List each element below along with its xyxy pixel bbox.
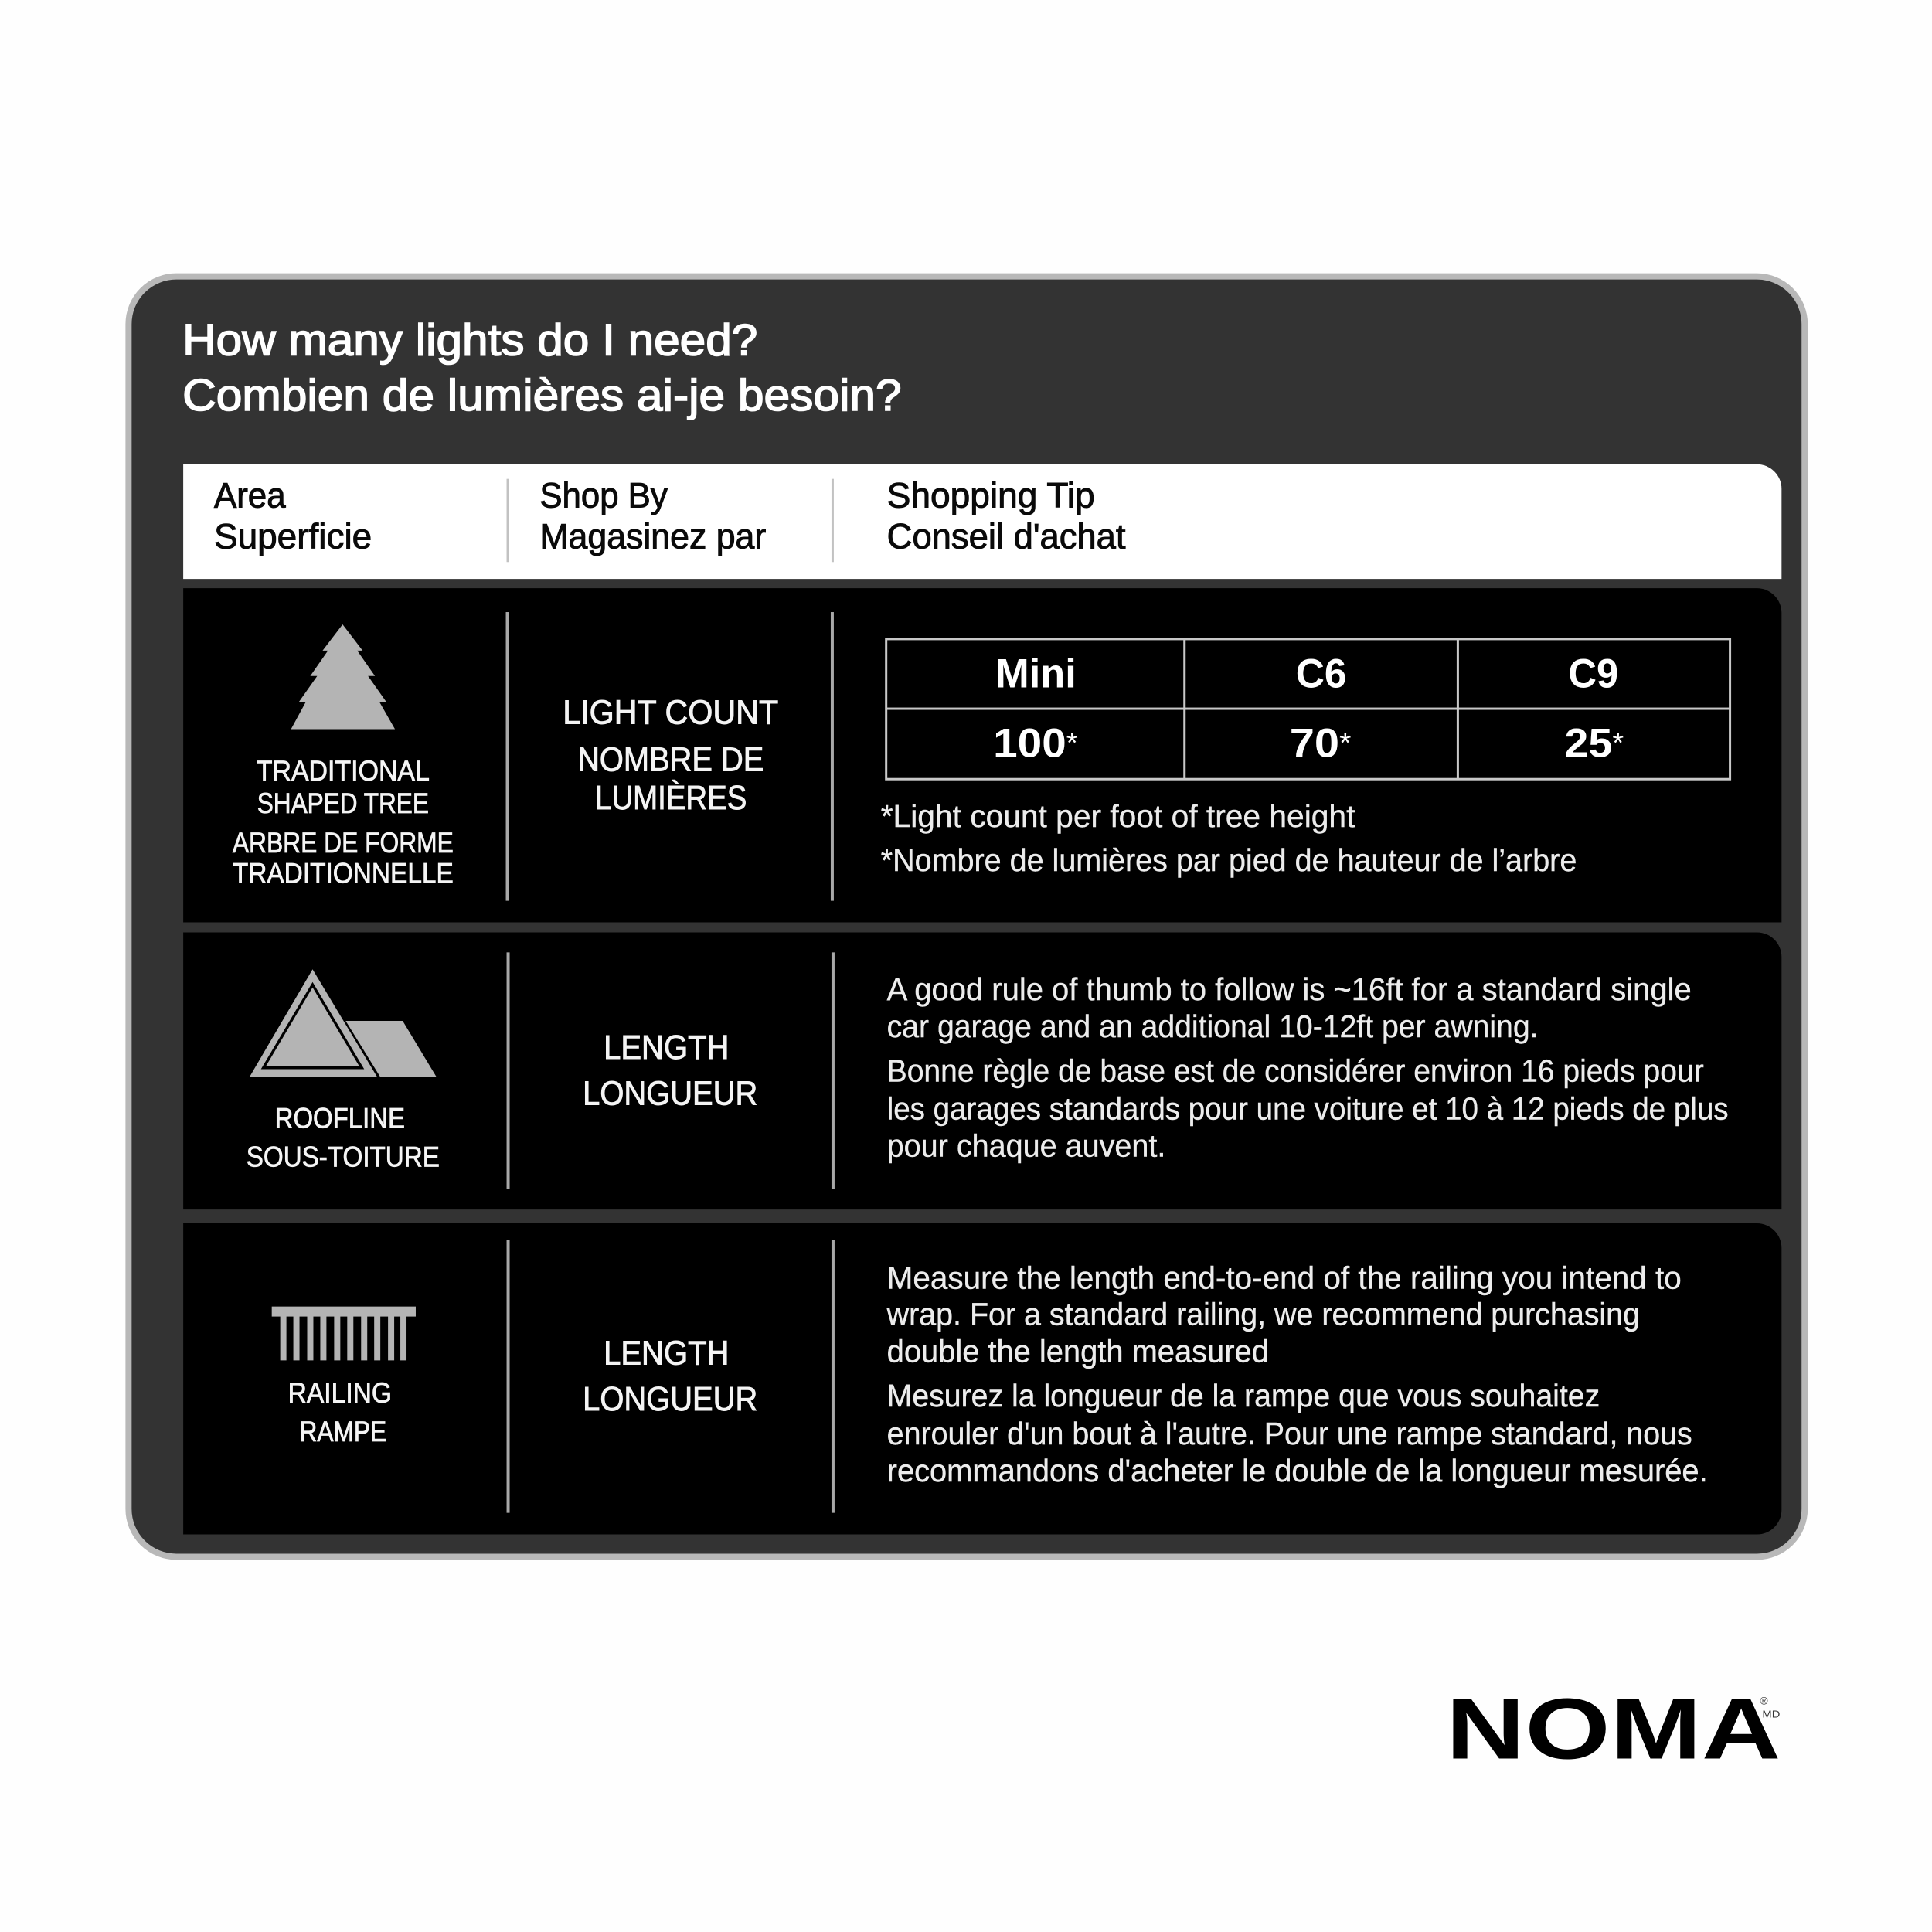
table: light counts: *	[1339, 727, 1351, 758]
panel: railing row	[183, 1223, 1781, 1535]
shop by: light count: LUMIÈRES	[595, 779, 747, 817]
table: light counts: 70	[1290, 720, 1335, 766]
shopping tip: roofline: A good rule of thumb to follow is ~16ft for a standard single	[887, 971, 1692, 1007]
shop by: light count: NOMBRE DE	[577, 740, 764, 778]
shopping tip: roofline: les garages standards pour une voiture et 10 à 12 pieds de plus	[887, 1091, 1729, 1127]
area label: railing: RAILING	[288, 1377, 392, 1409]
shopping tip: roofline: Bonne règle de base est de considérer environ 16 pieds pour	[887, 1053, 1704, 1089]
shop by: light count	[563, 693, 778, 817]
shopping tip: railing: enrouler d'un bout à l'autre. Pour une rampe standard, nous	[887, 1416, 1692, 1451]
icon: roofline	[250, 969, 437, 1077]
table: light counts	[886, 639, 1730, 779]
panel: table header: Shopping Tip	[887, 476, 1095, 515]
panel: table header: Superficie	[214, 516, 372, 556]
area label: tree: TRADITIONAL	[257, 755, 430, 787]
logo: NOMA: NOMA	[1446, 1680, 1781, 1777]
logo: NOMA: ®	[1760, 1695, 1768, 1707]
shop by: light count: LIGHT COUNT	[563, 693, 778, 731]
table: light counts: Mini	[995, 651, 1077, 697]
shopping tip: railing: recommandons d'acheter le double de la longueur mesurée.	[887, 1453, 1708, 1488]
footnotes: *Nombre de lumières par pied de hauteur de l’arbre	[881, 842, 1577, 878]
area label: tree: TRADITIONNELLE	[233, 858, 454, 889]
logo: NOMA: MD	[1762, 1709, 1780, 1720]
shop by: length: LENGTH	[604, 1029, 729, 1066]
panel: table header: Conseil d'achat	[887, 516, 1126, 556]
area label: railing	[288, 1377, 392, 1447]
title: How many lights do I need?	[182, 315, 757, 365]
shop by: length: LONGUEUR	[583, 1075, 757, 1113]
shop by: length	[583, 1334, 757, 1418]
table: light counts: C9	[1568, 651, 1618, 697]
area label: tree: SHAPED TREE	[257, 787, 429, 819]
panel: table header: Area	[214, 476, 286, 515]
table: light counts: C6	[1296, 651, 1346, 697]
area label: railing: RAMPE	[300, 1416, 386, 1447]
area label: roofline	[247, 1103, 440, 1172]
footnotes: *Light count per foot of tree height	[881, 798, 1355, 834]
title	[182, 315, 902, 420]
table: light counts: *	[1612, 727, 1624, 758]
area label: tree	[233, 755, 454, 889]
shopping tip: railing	[886, 1260, 1708, 1488]
panel: table header: Magasinez par	[539, 516, 766, 556]
shopping tip: railing: Measure the length end-to-end of the railing you intend to	[887, 1260, 1682, 1296]
title: Combien de lumières ai-je besoin?	[182, 371, 902, 420]
area label: tree: ARBRE DE FORME	[233, 827, 454, 859]
panel: traditional tree row	[183, 588, 1781, 923]
shopping tip: roofline: pour chaque auvent.	[887, 1128, 1165, 1163]
shopping tip: railing: wrap. For a standard railing, we recommend purchasing	[886, 1297, 1640, 1332]
shopping tip: roofline	[887, 971, 1729, 1163]
shop by: length: LENGTH	[604, 1334, 729, 1372]
panel: dark rounded card	[128, 277, 1804, 1556]
panel: roofline row	[183, 932, 1781, 1209]
icon: tree	[291, 624, 395, 729]
table: light counts: *	[1066, 727, 1078, 758]
shopping tip: railing: Mesurez la longueur de la rampe que vous souhaitez	[887, 1378, 1600, 1413]
table: light counts: 100	[993, 720, 1061, 766]
icon: railing	[272, 1307, 416, 1360]
footnotes	[881, 798, 1577, 878]
panel: table header	[183, 464, 1781, 579]
area label: roofline: ROOFLINE	[275, 1103, 405, 1134]
panel: table header: Shop By	[539, 476, 668, 515]
shopping tip: railing: double the length measured	[887, 1333, 1269, 1369]
shop by: length	[583, 1029, 757, 1113]
table: light counts: 25	[1564, 720, 1610, 766]
area label: roofline: SOUS-TOITURE	[247, 1141, 440, 1172]
shop by: length: LONGUEUR	[583, 1380, 757, 1418]
shopping tip: roofline: car garage and an additional 10-12ft per awning.	[887, 1009, 1539, 1044]
